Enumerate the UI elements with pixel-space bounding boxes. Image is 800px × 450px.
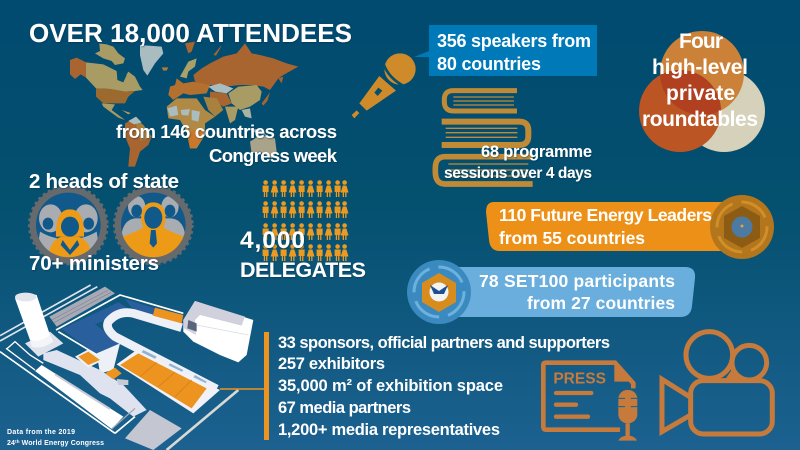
exhibition statistics list: 33 sponsors, official partners and supporters <box>278 334 610 352</box>
icon: gear badge with men <box>114 186 192 264</box>
title: OVER 18,000 ATTENDEES <box>29 18 352 48</box>
venue map <box>0 285 253 450</box>
heads of state text: 2 heads of state <box>29 170 179 193</box>
ministers text: 70+ ministers <box>29 252 159 275</box>
icon: press document with microphone: PRESS <box>553 370 606 387</box>
callout: speakers: 80 countries <box>437 54 541 74</box>
icon: microphone <box>352 53 416 118</box>
delegates text: DELEGATES <box>240 258 366 282</box>
exhibition statistics list: 1,200+ media representatives <box>278 421 500 439</box>
exhibition statistics list: 257 exhibitors <box>278 355 385 373</box>
data source note: th <box>15 439 20 444</box>
icon: gear badge with woman and men <box>29 186 107 265</box>
icon: blue hex badge <box>407 260 471 324</box>
world map <box>70 42 298 167</box>
programme sessions text: sessions over 4 days <box>444 165 592 182</box>
attendee countries text: Congress week <box>209 145 338 166</box>
panel: Future Energy Leaders: from 55 countries <box>499 228 645 248</box>
exhibition statistics list: 67 media partners <box>278 399 411 417</box>
venn diagram: roundtables: private <box>666 82 735 105</box>
callout: speakers <box>414 25 597 76</box>
data source note: World Energy Congress <box>20 440 104 447</box>
data source note: Data from the 2019 <box>7 429 75 436</box>
exhibition statistics list: 35,000 m² of exhibition space <box>278 377 503 395</box>
programme sessions text: 68 programme <box>481 143 592 161</box>
venn diagram: roundtables: roundtables <box>642 108 758 131</box>
panel: SET100 participants: from 27 countries <box>527 293 675 313</box>
callout: speakers: 356 speakers from <box>437 31 591 51</box>
pictogram: delegates <box>263 180 348 261</box>
attendee countries text: from 146 countries across <box>116 121 337 142</box>
connector line <box>220 388 264 390</box>
exhibition statistics list <box>278 334 610 439</box>
venn diagram: roundtables <box>639 30 765 152</box>
accent bar <box>264 332 269 440</box>
venn diagram: roundtables: high-level <box>652 56 748 79</box>
icon: stack of books <box>435 91 533 184</box>
panel: SET100 participants <box>407 260 695 324</box>
programme sessions text <box>444 143 592 182</box>
data source note: 24 <box>7 440 15 447</box>
map: Europe, Asia, Africa, Australia <box>167 42 298 158</box>
map: Americas <box>70 43 168 167</box>
attendee countries text <box>116 121 338 166</box>
delegates text <box>240 227 366 282</box>
data source note <box>7 429 104 447</box>
panel: Future Energy Leaders: 110 Future Energy Leaders <box>499 205 712 225</box>
delegates text: 4,000 <box>240 227 305 254</box>
icon: film camera <box>662 332 772 434</box>
panel: Future Energy Leaders <box>486 195 774 259</box>
venn diagram: roundtables: Four <box>679 30 723 53</box>
icon: press document with microphone <box>543 363 637 441</box>
icon: orange hex badge <box>710 195 774 259</box>
panel: SET100 participants: 78 SET100 participants <box>479 271 675 291</box>
